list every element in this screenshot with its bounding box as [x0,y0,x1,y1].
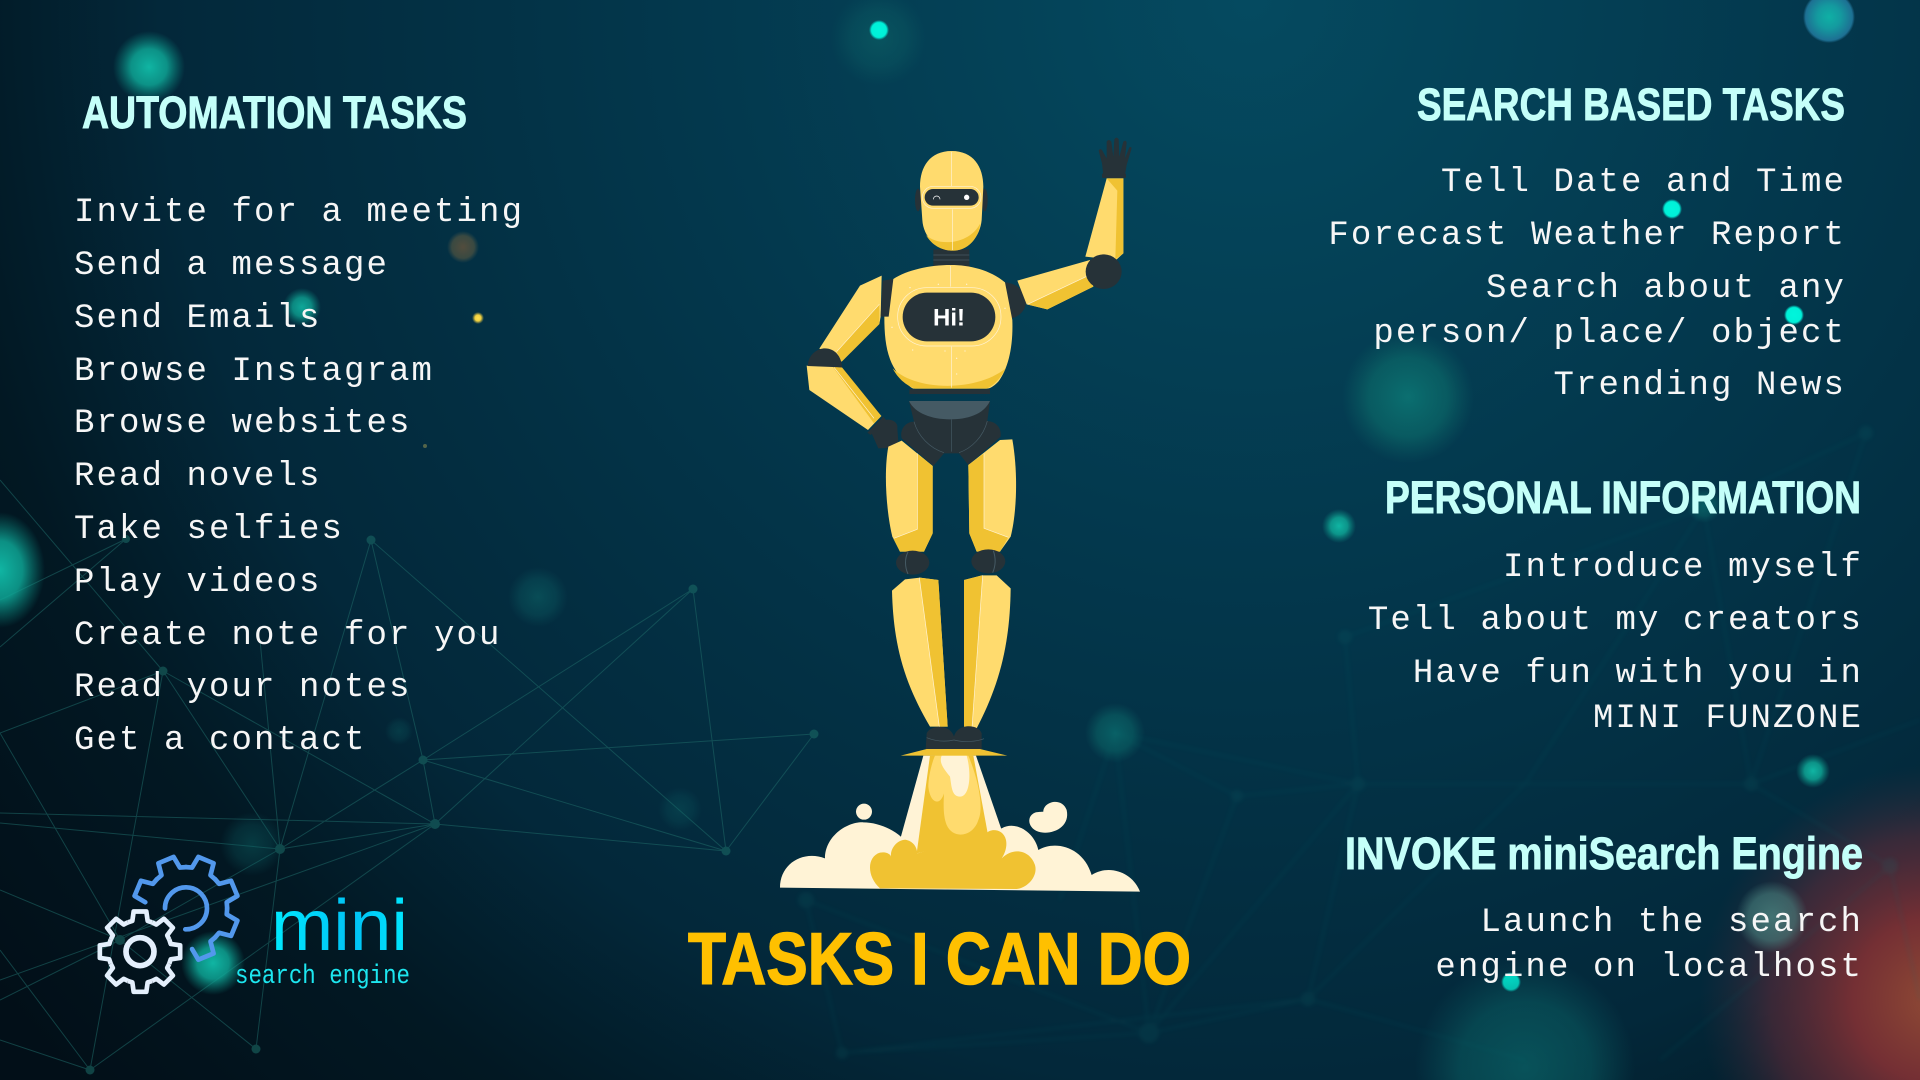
list: automation tasks: Take selfies [74,511,344,549]
list: automation tasks: Get a contact [74,722,367,760]
panel: search based tasks [1328,79,1846,405]
list: automation tasks: Read novels [74,458,322,496]
resting arm [807,276,898,448]
list: search based tasks: Forecast Weather Report [1328,217,1846,255]
list: automation tasks: Play videos [74,564,322,602]
logo tagline: search engine [235,962,410,992]
list: invoke minisearch engine: Launch the search [1480,904,1863,942]
list: automation tasks: Send a message [74,247,389,285]
logo wordmark: mini [271,886,408,966]
heading: invoke minisearch engine: INVOKE miniSearch Engine [1345,828,1863,879]
list: search based tasks: Search about any [1486,270,1846,308]
panel: personal information [1368,472,1863,738]
logo: mini search engine [100,854,410,992]
list: search based tasks: Tell Date and Time [1441,164,1846,202]
head [915,151,988,251]
list: automation tasks [74,194,524,760]
list: personal information: Tell about my creators [1368,602,1863,640]
feet [926,726,984,749]
panel: automation tasks [74,87,524,760]
pelvis [901,401,1001,466]
neck [933,249,969,267]
robot illustration [780,138,1140,892]
list: search based tasks [1328,164,1846,405]
icon: gears [100,854,240,992]
robot lower body and rocket flame [780,549,1140,892]
list: automation tasks: Send Emails [74,300,322,338]
robot upper body [807,138,1131,552]
heading: automation tasks: AUTOMATION TASKS [82,87,467,138]
list: search based tasks: Trending News [1553,367,1846,405]
list: automation tasks: Read your notes [74,669,412,707]
network lines: left [0,480,818,1074]
title: TASKS I CAN DO [688,919,1191,1000]
raised arm [1005,138,1131,318]
list: search based tasks: person/ place/ object [1373,315,1846,353]
list: automation tasks: Browse websites [74,405,412,443]
list: automation tasks: Invite for a meeting [74,194,524,232]
shins [892,575,1011,728]
list: automation tasks: Browse Instagram [74,353,434,391]
panel: invoke minisearch engine [1345,828,1863,987]
torso: Hi! [933,304,965,331]
knees [896,549,1005,575]
clouds and flame [780,749,1140,892]
list: personal information [1368,549,1863,738]
torso [881,265,1012,394]
list: invoke minisearch engine [1435,904,1863,987]
list: personal information: Introduce myself [1503,549,1863,587]
network lines: right (blurred) [798,426,1920,1060]
list: personal information: MINI FUNZONE [1593,700,1863,738]
thighs [886,439,1016,552]
list: automation tasks: Create note for you [74,617,502,655]
list: personal information: Have fun with you in [1413,655,1863,693]
list: invoke minisearch engine: engine on localhost [1435,949,1863,987]
